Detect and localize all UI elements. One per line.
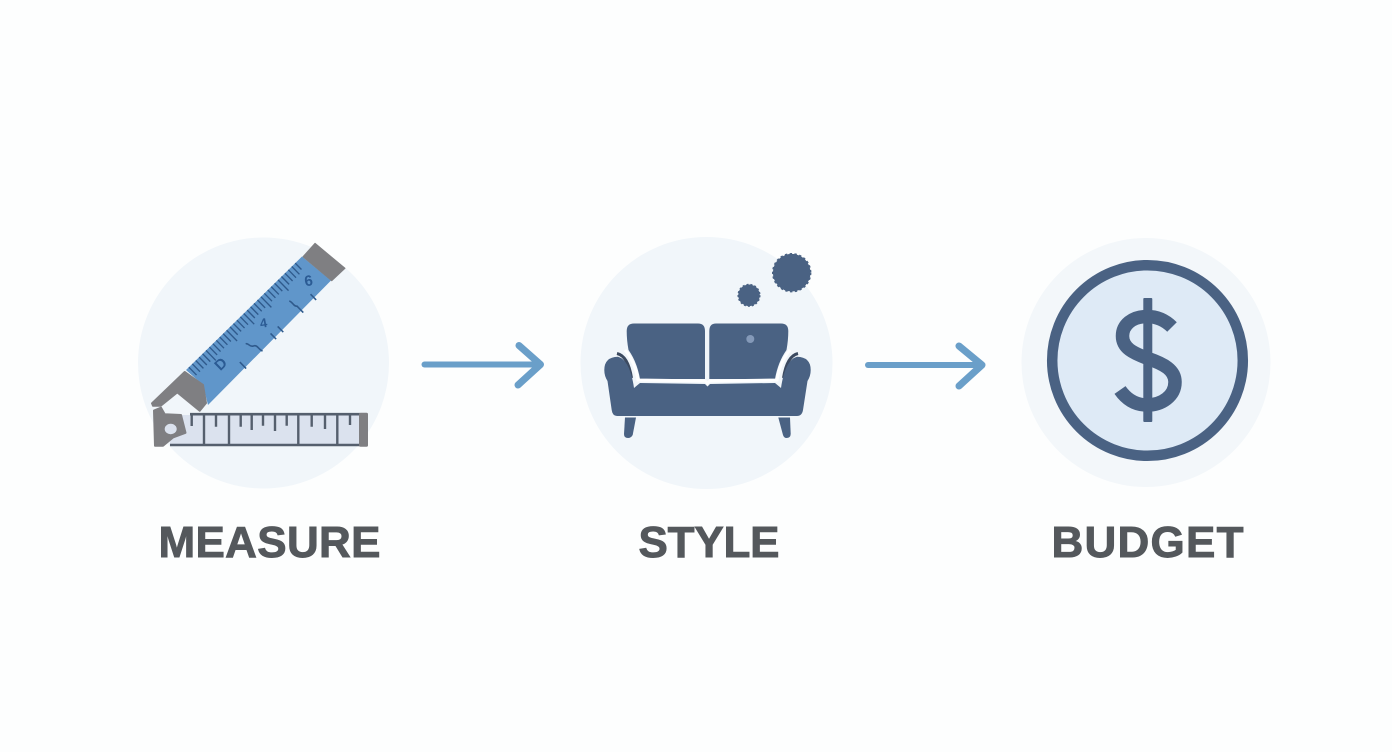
background circle: style xyxy=(580,237,832,489)
lower ruler edges and ticks xyxy=(170,414,360,445)
sofa left leg xyxy=(624,418,636,438)
tape end cap xyxy=(303,243,345,281)
tape housing bracket xyxy=(152,372,206,411)
icon: sofa xyxy=(604,324,811,438)
icon: tape measure xyxy=(152,243,368,447)
arrow: style to budget xyxy=(868,346,982,386)
numeral on tape blade: 4 xyxy=(259,315,269,331)
sofa right leg xyxy=(778,418,791,438)
sofa back cushion left xyxy=(627,324,705,379)
icon: small style blob xyxy=(738,284,760,306)
ruler right cap xyxy=(359,413,368,447)
arrow: measure to style xyxy=(424,346,540,385)
step: measure xyxy=(138,238,389,488)
tape blade: blue rising section xyxy=(186,256,331,405)
step: style xyxy=(580,237,832,489)
lower ruler body xyxy=(170,415,360,444)
dollar sign curve xyxy=(1120,316,1175,405)
cushion button xyxy=(746,335,754,343)
sofa arm and seat gap highlight xyxy=(625,350,790,383)
sofa arm shadows xyxy=(617,354,798,378)
ruler left hook with hole xyxy=(154,408,186,446)
coin ring xyxy=(1052,265,1243,456)
numeral on tape blade: 6 xyxy=(303,272,314,290)
background circle: budget xyxy=(1022,238,1270,487)
blade tick marks and numerals xyxy=(189,259,328,396)
icon: large style blob xyxy=(773,254,810,292)
label: measure: MEASURE xyxy=(158,518,380,567)
step: budget xyxy=(1022,238,1270,487)
sofa seat and arms xyxy=(604,357,811,416)
label: budget: BUDGET xyxy=(1052,518,1244,567)
sofa back cushion right xyxy=(709,324,788,379)
numeral on tape blade: D xyxy=(211,354,231,374)
background circle: measure xyxy=(138,238,389,488)
dollar sign stem xyxy=(1143,298,1152,422)
icon: dollar coin xyxy=(1052,265,1243,456)
label: style: STYLE xyxy=(638,518,780,567)
